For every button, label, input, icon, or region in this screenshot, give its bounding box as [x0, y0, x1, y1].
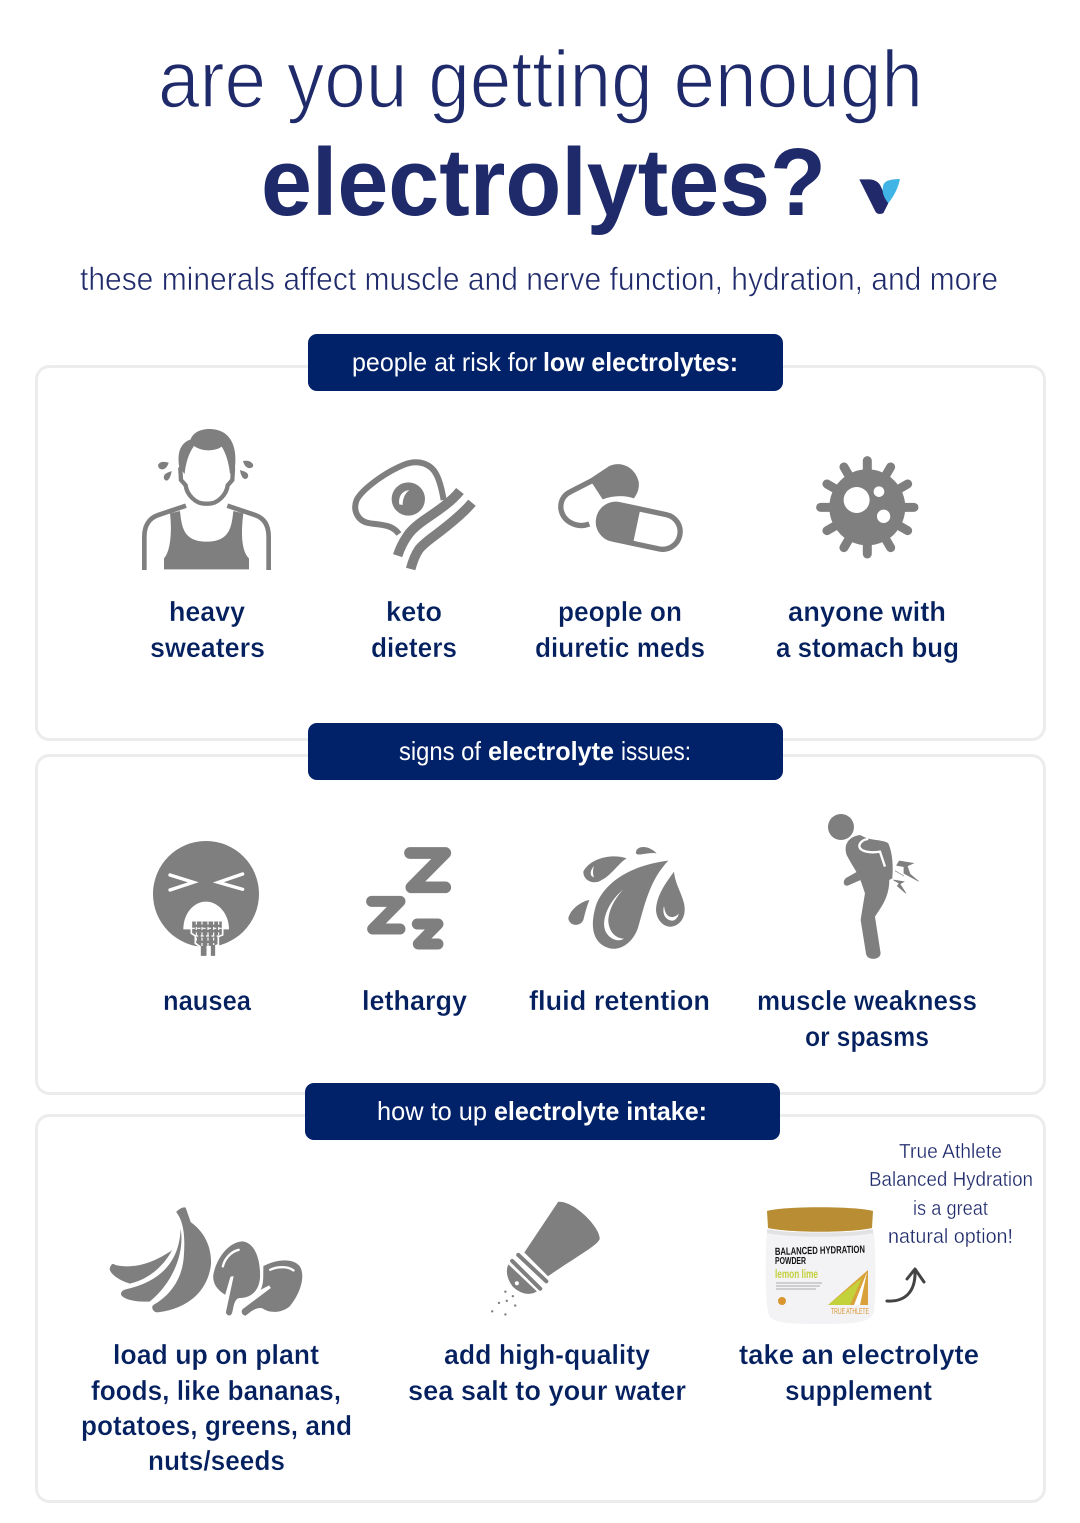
- icon: supplement jar: TRUE ATHLETE: [831, 1307, 869, 1316]
- heading: signs of issues: signs of: [399, 736, 482, 766]
- label: plant foods: potatoes, greens, and: [81, 1410, 352, 1441]
- icon: egg and bacon: [355, 462, 472, 569]
- label: fluid retention: fluid retention: [529, 985, 710, 1016]
- label: sea salt: sea salt to your water: [408, 1375, 686, 1406]
- label: anyone with a stomach bug: [776, 596, 959, 663]
- heading: signs of issues: issues:: [621, 736, 691, 766]
- icon: supplement jar: [766, 1207, 876, 1324]
- icon: brand logo: [859, 179, 900, 214]
- subtitle: these minerals affect muscle and nerve function, hydration, and more: [80, 261, 998, 297]
- label: anyone with a stomach bug: anyone with: [788, 596, 946, 627]
- heading: signs of issues: electrolyte: [488, 736, 614, 766]
- label: keto dieters: [371, 596, 457, 663]
- callout: true athlete note: is a great: [913, 1198, 988, 1220]
- callout: true athlete note: [869, 1141, 1033, 1248]
- panel: people at risk: [36, 334, 1044, 740]
- callout: true athlete note: True Athlete: [899, 1141, 1002, 1163]
- heading: how to up intake: how to up: [377, 1096, 487, 1126]
- label: muscle weakness or spasms: muscle weakness: [757, 985, 977, 1016]
- label: plant foods: [81, 1339, 352, 1476]
- label: people on diuretic meds: people on: [558, 596, 682, 627]
- icon: fluid drops: [568, 847, 685, 949]
- label: anyone with a stomach bug: a stomach bug: [776, 632, 959, 663]
- icon: sleep Zs: [372, 853, 445, 944]
- label: plant foods: nuts/seeds: [148, 1445, 285, 1476]
- label: sea salt: add high-quality: [444, 1339, 650, 1370]
- label: heavy sweaters: sweaters: [150, 632, 265, 663]
- label: plant foods: foods, like bananas,: [91, 1375, 341, 1406]
- title: [158, 35, 923, 236]
- label: supplement: take an electrolyte: [739, 1339, 979, 1370]
- label: plant foods: load up on plant: [113, 1339, 319, 1370]
- icon: sweating man: [144, 429, 269, 570]
- callout: true athlete note: natural option!: [888, 1226, 1013, 1248]
- icon: germ: [821, 461, 914, 554]
- icon: supplement jar: POWDER: [775, 1256, 807, 1267]
- label: sea salt: [408, 1339, 686, 1406]
- icon: bananas and greens: [110, 1207, 302, 1316]
- callout: true athlete note: Balanced Hydration: [869, 1169, 1033, 1191]
- icon: capsules: [561, 464, 684, 555]
- icon: salt shaker: [491, 1202, 600, 1316]
- label: muscle weakness or spasms: [757, 985, 977, 1052]
- label: keto dieters: dieters: [371, 632, 457, 663]
- title: are you getting enough: [158, 35, 923, 125]
- label: keto dieters: keto: [386, 596, 442, 627]
- icon: supplement jar: lemon lime: [775, 1267, 818, 1281]
- arrow: [887, 1269, 924, 1301]
- label: people on diuretic meds: diuretic meds: [535, 632, 705, 663]
- heading: people at risk: people at risk for: [352, 347, 537, 377]
- heading: signs of issues: [308, 723, 783, 780]
- panel: how to up intake: [36, 1083, 1044, 1502]
- panel: signs of issues: [36, 723, 1044, 1094]
- heading: how to up intake: electrolyte intake:: [494, 1096, 707, 1126]
- label: heavy sweaters: heavy: [169, 596, 245, 627]
- icon: supplement jar: BALANCED HYDRATION: [775, 1244, 865, 1258]
- label: heavy sweaters: [150, 596, 265, 663]
- label: lethargy: lethargy: [362, 985, 467, 1016]
- heading: people at risk: low electrolytes:: [543, 347, 738, 377]
- label: supplement: supplement: [785, 1375, 932, 1406]
- label: nausea: nausea: [163, 985, 251, 1016]
- label: people on diuretic meds: [535, 596, 705, 663]
- label: muscle weakness or spasms: or spasms: [805, 1021, 929, 1052]
- label: supplement: [739, 1339, 979, 1406]
- icon: nausea face: [153, 841, 259, 957]
- heading: how to up intake: [305, 1083, 780, 1140]
- heading: people at risk: [308, 334, 783, 391]
- icon: person with back pain: [828, 814, 919, 959]
- title: electrolytes?: [261, 129, 826, 236]
